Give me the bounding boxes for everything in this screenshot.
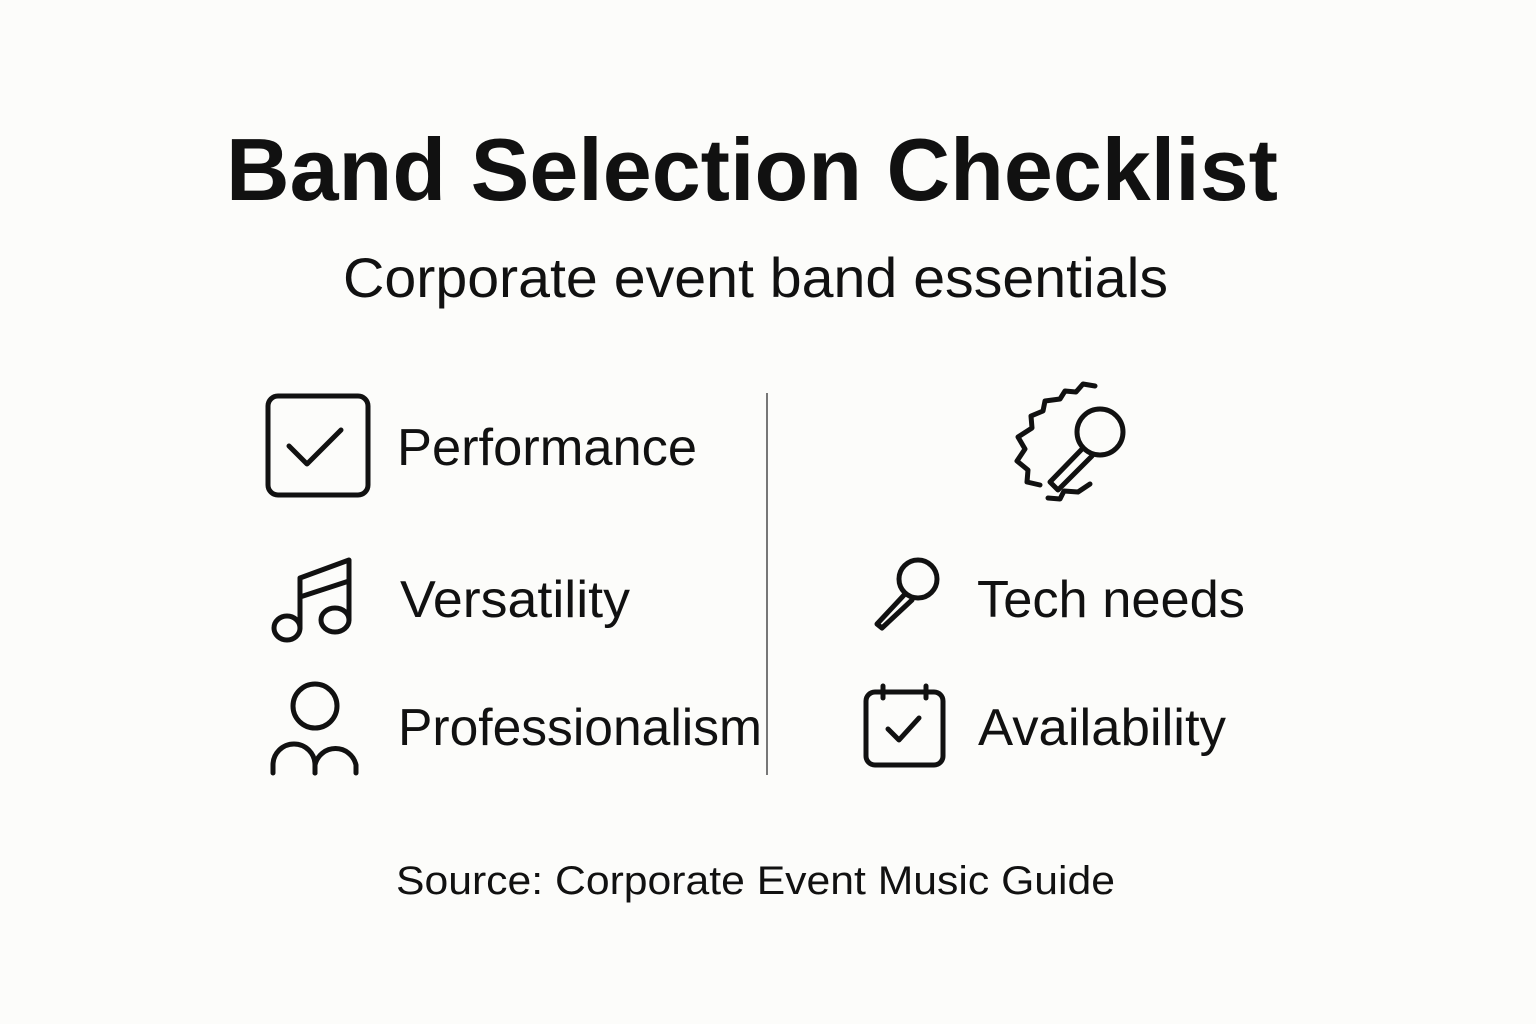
item: professionalism [273, 684, 762, 773]
icon: music notes [274, 560, 349, 640]
label: availability: Availability [978, 699, 1226, 757]
label: tech needs: Tech needs [977, 571, 1245, 629]
item: versatility [274, 560, 630, 640]
label: professionalism: Professionalism [398, 699, 762, 757]
title: Band Selection Checklist [226, 120, 1278, 219]
item: performance [268, 396, 697, 495]
source note: Source: Corporate Event Music Guide [396, 859, 1115, 903]
label: versatility: Versatility [400, 571, 630, 629]
icon: gear with microphone [1017, 384, 1123, 499]
icon: calendar check [866, 686, 943, 765]
icon: microphone [877, 560, 937, 628]
label: performance: Performance [397, 419, 697, 477]
subtitle: Corporate event band essentials [343, 246, 1168, 309]
icon: person [273, 684, 356, 773]
icon: checkbox [268, 396, 368, 495]
item: tech needs [877, 560, 1245, 629]
item: availability [866, 686, 1226, 765]
